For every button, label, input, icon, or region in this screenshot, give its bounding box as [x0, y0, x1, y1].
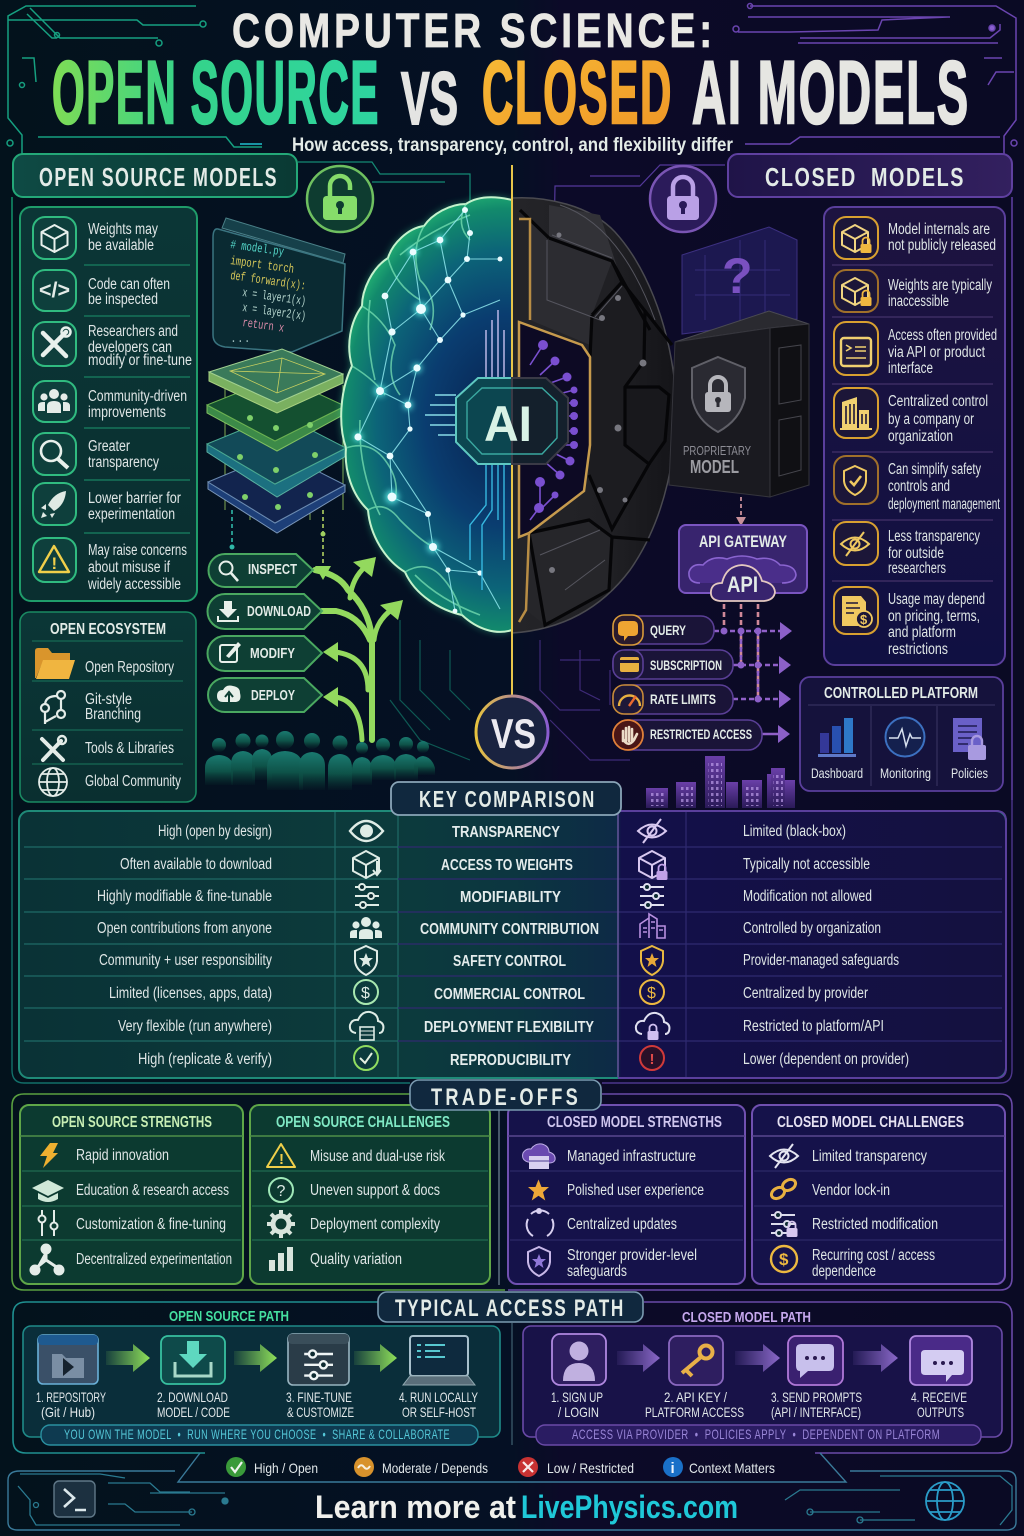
icon: question: [269, 1178, 293, 1202]
heading: typical access path: TYPICAL ACCESS PATH: [395, 1295, 625, 1322]
step: fine-tune: [286, 1334, 354, 1420]
step: API key: 2. API KEY /: [664, 1389, 727, 1405]
code window: ...: [230, 333, 251, 346]
item: experimentation: [33, 483, 181, 525]
icon: chain: [769, 1177, 798, 1201]
AI chip: [456, 378, 568, 464]
item: community: Community-driven: [88, 388, 187, 405]
row: modifiability: MODIFIABILITY: [460, 889, 561, 906]
arrow: [617, 1344, 660, 1372]
icon: tuning: [38, 1210, 58, 1236]
pill: query: [613, 615, 714, 645]
pill: subscription: [613, 650, 733, 679]
panel: controlled platform: [800, 677, 1003, 791]
proprietary model box: MODEL: [690, 457, 739, 477]
arrow: [106, 1344, 150, 1372]
card: closed model strengths: Centralized updates: [567, 1216, 677, 1233]
item: researchers: modify or fine-tune: [88, 352, 192, 369]
arrows: tree of actions: [315, 557, 403, 740]
heading: typical access path: [378, 1292, 643, 1322]
card: open source challenges: [250, 1105, 490, 1284]
card: open source challenges: Deployment complexity: [310, 1216, 440, 1233]
call to action: Learn more at: [315, 1489, 516, 1525]
item: researchers: developers can: [88, 339, 172, 356]
pill: download: [208, 594, 322, 629]
pill: deploy: [208, 678, 322, 712]
circuit traces: header: [7, 4, 1017, 160]
panel: open ecosystem: Open Repository: [85, 659, 174, 676]
item: misuse warning: May raise concerns: [88, 542, 187, 559]
pill: restricted access: RESTRICTED ACCESS: [650, 727, 752, 742]
card: closed model challenges: Vendor lock-in: [812, 1182, 890, 1199]
icon: closed lock: [650, 166, 716, 232]
step: sign up: 1. SIGN UP: [551, 1389, 603, 1405]
API gateway: [679, 525, 807, 601]
icon: dashboard: [811, 718, 863, 781]
row: commercial control: $: [361, 985, 370, 1002]
row: modifiability: Highly modifiable & fine-tunable: [97, 888, 272, 905]
card: closed model challenges: Recurring cost / access: [812, 1247, 935, 1264]
step: send prompts: [771, 1336, 862, 1420]
node glow: [353, 235, 445, 553]
item: centralized control: organization: [888, 428, 953, 445]
card: open source challenges: Uneven support & docs: [310, 1182, 440, 1199]
circuit traces: [18, 1474, 1012, 1525]
header: open source models: [13, 154, 297, 197]
step: receive outputs: [910, 1336, 972, 1420]
heading: trade-offs: TRADE-OFFS: [431, 1084, 581, 1111]
item: safety: controls and: [888, 478, 950, 495]
step: download: MODEL / CODE: [157, 1404, 230, 1420]
row: reproducibility: Lower (dependent on provider): [743, 1051, 909, 1068]
row: reproducibility: REPRODUCIBILITY: [450, 1052, 571, 1069]
row: reproducibility: !: [650, 1051, 654, 1068]
card: closed model strengths: safeguards: [567, 1263, 627, 1280]
icon: terminal: [54, 1481, 95, 1517]
panel: open ecosystem: Tools & Libraries: [85, 740, 174, 757]
row: commercial control: Centralized by provider: [743, 985, 868, 1002]
code window: import torch: [229, 254, 295, 277]
icon: updates: [527, 1209, 553, 1236]
item: safety: [834, 456, 1000, 513]
frame: typical access path: [13, 1302, 1012, 1453]
community silhouettes: [205, 731, 435, 790]
table: key comparison: [19, 811, 1006, 1078]
code window: x = layer1(x): [241, 286, 307, 309]
header: closed models: CLOSED MODELS: [765, 162, 965, 192]
card: open source strengths: Education & research access: [76, 1182, 229, 1199]
row: safety control: SAFETY CONTROL: [453, 953, 566, 970]
item: weights: be available: [88, 237, 154, 254]
item: misuse warning: widely accessible: [87, 576, 181, 593]
row: transparency: High (open by design): [158, 823, 272, 840]
row: reproducibility: High (replicate & verify): [138, 1051, 272, 1068]
row: community contribution: [97, 914, 881, 939]
legend item: context: [663, 1457, 775, 1477]
item: transparency: [33, 433, 159, 475]
card: closed model strengths: Managed infrastructure: [567, 1148, 696, 1165]
code window: [213, 218, 345, 352]
panel: open ecosystem: OPEN ECOSYSTEM: [50, 621, 166, 638]
item: weights: Weights may: [88, 221, 158, 238]
item: researchers: [33, 322, 192, 369]
card: closed model challenges: Limited transparency: [812, 1148, 927, 1165]
circuit traces: around locks: [298, 162, 725, 760]
row: transparency: [158, 819, 846, 843]
arrow: [354, 1344, 397, 1372]
heading: key comparison: KEY COMPARISON: [419, 786, 596, 812]
icon: network: [31, 1245, 63, 1274]
item: pricing: and platform: [888, 624, 956, 641]
row: community contribution: Controlled by organization: [743, 920, 881, 937]
icon: monitoring: Monitoring: [880, 765, 931, 781]
step: receive outputs: OUTPUTS: [917, 1404, 964, 1420]
footer panel: [8, 1453, 1016, 1530]
row: deployment flexibility: Very flexible (run anywhere): [118, 1018, 272, 1035]
row and column lines: [24, 812, 398, 1077]
item: misuse warning: !: [52, 554, 57, 573]
item: code: [33, 270, 170, 311]
takeaway pill: YOU OWN THE MODEL • RUN WHERE YOU CHOOSE • SHARE & COLLABORATE: [64, 1426, 450, 1442]
item: community: [33, 381, 187, 422]
panel: open ecosystem: [20, 612, 196, 802]
row: transparency: Limited (black-box): [743, 823, 846, 840]
brain circuit traces: [425, 310, 504, 590]
icon: dashboard: Dashboard: [811, 765, 863, 781]
item: pricing: on pricing, terms,: [888, 608, 980, 625]
item: centralized control: [834, 388, 988, 445]
step: repository: 1. REPOSITORY: [36, 1389, 106, 1405]
icon: monitoring: [880, 718, 931, 781]
pill: deploy: DEPLOY: [251, 688, 295, 704]
call to action: LivePhysics.com: [521, 1489, 738, 1525]
card: open source strengths: [20, 1105, 243, 1284]
icon: lightning: [40, 1143, 58, 1168]
step: sign up: / LOGIN: [558, 1404, 599, 1420]
item: API access: via API or product: [888, 344, 986, 361]
title: CLOSED: [482, 42, 673, 142]
arrowheads: [720, 622, 792, 743]
API gateway: API: [727, 572, 758, 597]
pill: restricted access: [613, 720, 762, 750]
pill: rate limits: [613, 685, 733, 714]
pill: inspect: INSPECT: [248, 562, 297, 578]
item: code: Code can often: [88, 276, 170, 293]
card: closed model challenges: [752, 1105, 1005, 1284]
row: community contribution: Open contributions from anyone: [97, 920, 272, 937]
item: code: be inspected: [88, 291, 158, 308]
icon: dollar: $: [779, 1250, 789, 1269]
panel: controlled platform: CONTROLLED PLATFORM: [824, 685, 978, 702]
title: [52, 5, 970, 142]
step: repository: (Git / Hub): [41, 1404, 95, 1420]
pill: query: QUERY: [650, 623, 686, 638]
icon: dollar: [771, 1246, 797, 1272]
icon: bars: [269, 1247, 293, 1271]
legend item: low: Low / Restricted: [547, 1460, 634, 1476]
row: community contribution: COMMUNITY CONTRIBUTION: [420, 921, 599, 938]
card: closed model strengths: Polished user experience: [567, 1182, 704, 1199]
outer frame: comparison: [12, 800, 410, 1083]
card: closed model strengths: [508, 1105, 745, 1284]
neural network links: [358, 210, 500, 611]
legend item: high: [226, 1457, 318, 1477]
panel: open source path: [23, 1309, 500, 1445]
step: send prompts: (API / INTERFACE): [771, 1404, 861, 1420]
item: pricing: Usage may depend: [888, 591, 985, 608]
row: commercial control: [109, 980, 868, 1004]
card: closed model strengths: Stronger provider-level: [567, 1247, 697, 1264]
item: community: improvements: [88, 404, 166, 421]
item: weights: [33, 217, 158, 259]
icon: git branching: [41, 691, 65, 724]
item: model internals: [834, 217, 996, 259]
legend item: moderate: [354, 1457, 488, 1477]
step: fine-tune: & CUSTOMIZE: [287, 1404, 354, 1420]
pill: subscription: SUBSCRIPTION: [650, 658, 722, 673]
row: safety control: [99, 946, 899, 975]
icon: tools: [42, 736, 66, 760]
question hologram: ?: [722, 248, 753, 304]
item: experimentation: experimentation: [88, 506, 175, 523]
row: access to weights: Typically not accessible: [743, 856, 870, 873]
step: download: 2. DOWNLOAD: [157, 1389, 228, 1405]
center divider line: [511, 165, 513, 700]
header: open source models: OPEN SOURCE MODELS: [39, 162, 278, 192]
proprietary model box: [669, 227, 809, 497]
icon: gear: [267, 1210, 295, 1238]
AI chip: AI: [484, 396, 532, 452]
item: weights inaccessible: inaccessible: [888, 293, 949, 310]
card: closed model challenges: dependence: [812, 1263, 876, 1280]
icon: policies: [951, 718, 988, 781]
step: repository: [36, 1335, 106, 1420]
arrow: model to gateway: [736, 497, 746, 526]
icon: warning: [267, 1144, 295, 1168]
pill: download: DOWNLOAD: [247, 604, 311, 620]
row: modifiability: [97, 884, 872, 908]
pill: modify: [208, 636, 322, 671]
call to action: [315, 1489, 738, 1525]
step: receive outputs: 4. RECEIVE: [911, 1389, 967, 1405]
legend item: context: i: [670, 1460, 675, 1477]
subtitle: How access, transparency, control, and flexibility differ: [292, 135, 734, 156]
row: deployment flexibility: DEPLOYMENT FLEXIBILITY: [424, 1019, 594, 1036]
item: transparency: transparency: [88, 454, 159, 471]
arrow: [234, 1344, 277, 1372]
panel: open ecosystem: Branching: [85, 706, 141, 723]
item: safety: Can simplify safety: [888, 461, 981, 478]
panel: open ecosystem: Git-style: [85, 691, 132, 708]
row: reproducibility: [138, 1046, 909, 1070]
inner circuit cavity: [519, 322, 590, 537]
armor facets: [526, 205, 669, 625]
icon: restricted sliders: [771, 1212, 798, 1237]
code window: def forward(x):: [229, 269, 307, 294]
card: open source challenges: OPEN SOURCE CHALLENGES: [276, 1114, 450, 1131]
row: commercial control: Limited (licenses, apps, data): [109, 985, 272, 1002]
row: commercial control: $: [647, 985, 656, 1002]
item: centralized control: by a company or: [888, 411, 974, 428]
icon: shield lock: [692, 357, 745, 432]
item: weights inaccessible: [834, 270, 992, 312]
arrow: [735, 1344, 780, 1372]
VS badge: VS: [491, 710, 536, 757]
panel: closed model path: [523, 1310, 1002, 1445]
item: model internals: Model internals are: [888, 221, 990, 238]
icon: globe: [926, 1482, 964, 1520]
title: OPEN SOURCE: [52, 42, 380, 142]
title: COMPUTER SCIENCE:: [232, 5, 716, 58]
icon: open lock: [307, 166, 373, 232]
step: fine-tune: 3. FINE-TUNE: [286, 1389, 352, 1405]
code window: x = layer2(x): [241, 301, 307, 324]
item: less transparency: for outside: [888, 545, 944, 562]
brain: right armored half: [512, 198, 676, 633]
brain: left neural half: [341, 197, 512, 632]
step: API key: [645, 1336, 744, 1420]
item: misuse warning: [33, 538, 187, 593]
item: less transparency: researchers: [888, 560, 946, 577]
legend item: high: High / Open: [254, 1460, 318, 1476]
item: less transparency: Less transparency: [888, 528, 980, 545]
item: experimentation: Lower barrier for: [88, 490, 181, 507]
card: closed model challenges: Restricted modification: [812, 1216, 938, 1233]
step: API key: PLATFORM ACCESS: [645, 1404, 744, 1420]
card: open source strengths: OPEN SOURCE STRENGTHS: [52, 1114, 212, 1131]
pill: rate limits: RATE LIMITS: [650, 692, 716, 707]
item: pricing: $: [860, 612, 868, 627]
step: run locally: OR SELF-HOST: [402, 1404, 476, 1420]
card: open source strengths: Decentralized experimentation: [76, 1251, 232, 1268]
step: download: [157, 1336, 230, 1420]
icon: globe: [39, 768, 67, 796]
card: closed model strengths: CLOSED MODEL STRENGTHS: [547, 1114, 722, 1131]
icon: shield star: [528, 1247, 550, 1276]
step: run locally: [399, 1336, 478, 1420]
row: commercial control: COMMERCIAL CONTROL: [434, 986, 585, 1003]
card: open source challenges: Misuse and dual-use risk: [310, 1148, 445, 1165]
pill: modify: MODIFY: [250, 646, 295, 662]
icon: folder: [35, 648, 75, 679]
icon: star: [528, 1180, 549, 1200]
item: pricing: restrictions: [888, 641, 948, 658]
item: pricing: [834, 587, 985, 658]
VS badge: [476, 696, 548, 768]
card: closed model challenges: CLOSED MODEL CHALLENGES: [777, 1114, 964, 1131]
row: transparency: TRANSPARENCY: [452, 824, 560, 841]
code window: return x: [241, 316, 285, 336]
panel: open ecosystem: Global Community: [85, 773, 181, 790]
API gateway: API GATEWAY: [699, 533, 787, 551]
step: sign up: [551, 1334, 606, 1420]
icon: policies: Policies: [951, 765, 988, 781]
row: modifiability: Modification not allowed: [743, 888, 872, 905]
frame: trade-offs: [12, 1094, 1012, 1290]
title: VS: [401, 57, 458, 140]
step: run locally: 4. RUN LOCALLY: [399, 1389, 478, 1405]
row: deployment flexibility: Restricted to platform/API: [743, 1018, 884, 1035]
row: access to weights: Often available to download: [120, 856, 272, 873]
layer 2: [207, 376, 345, 451]
legend: [226, 1457, 775, 1477]
dashed API routes: [714, 604, 782, 734]
arrow: [853, 1344, 898, 1372]
legend item: moderate: Moderate / Depends: [382, 1460, 488, 1476]
row: access to weights: ACCESS TO WEIGHTS: [441, 857, 573, 874]
icon: managed infrastructure: [523, 1144, 555, 1169]
row: deployment flexibility: [118, 1012, 884, 1040]
layer 1: [209, 349, 343, 413]
row: safety control: Community + user responsibility: [99, 952, 272, 969]
heading: key comparison: [391, 782, 621, 815]
card: open source strengths: Customization & fine-tuning: [76, 1216, 226, 1233]
row: access to weights: [120, 851, 870, 880]
step: send prompts: 3. SEND PROMPTS: [771, 1389, 862, 1405]
pill: inspect: [208, 554, 313, 587]
layer 3: [207, 414, 346, 497]
panel: closed model path: CLOSED MODEL PATH: [682, 1310, 811, 1326]
heading: trade-offs: [410, 1080, 601, 1111]
panel: closed model features: [824, 207, 1005, 665]
card: open source strengths: Rapid innovation: [76, 1147, 169, 1164]
takeaway pill: [536, 1425, 981, 1445]
item: less transparency: [834, 522, 980, 577]
brain folds: [346, 204, 480, 615]
row: safety control: Provider-managed safeguards: [743, 952, 899, 969]
item: API access: interface: [888, 360, 933, 377]
item: researchers: Researchers and: [88, 323, 178, 340]
item: transparency: Greater: [88, 438, 130, 455]
item: API access: [834, 322, 997, 377]
takeaway pill: [41, 1425, 478, 1445]
legend item: context: Context Matters: [689, 1460, 775, 1476]
panel: open source features: [20, 207, 197, 601]
neural network layer stack: [207, 349, 346, 566]
icon: graduation cap: [32, 1180, 64, 1202]
outer side frame lines: [11, 197, 13, 800]
item: misuse warning: about misuse if: [88, 559, 171, 576]
legend item: low: [518, 1457, 634, 1477]
layer 4: [208, 452, 345, 533]
panel: open source path: OPEN SOURCE PATH: [169, 1309, 289, 1325]
city skyline: [646, 756, 795, 808]
icon: warning: !: [279, 1151, 284, 1168]
item: centralized control: Centralized control: [888, 393, 988, 410]
question hologram: [682, 227, 797, 334]
proprietary model box: PROPRIETARY: [683, 443, 751, 458]
icon: question: ?: [276, 1183, 286, 1200]
neural nodes: [354, 207, 502, 613]
card: open source challenges: Quality variation: [310, 1251, 402, 1268]
item: code: </>: [39, 279, 70, 302]
code window: # model.py: [229, 238, 285, 260]
icon: eye off: [770, 1144, 798, 1168]
header: closed models: [728, 154, 1012, 197]
